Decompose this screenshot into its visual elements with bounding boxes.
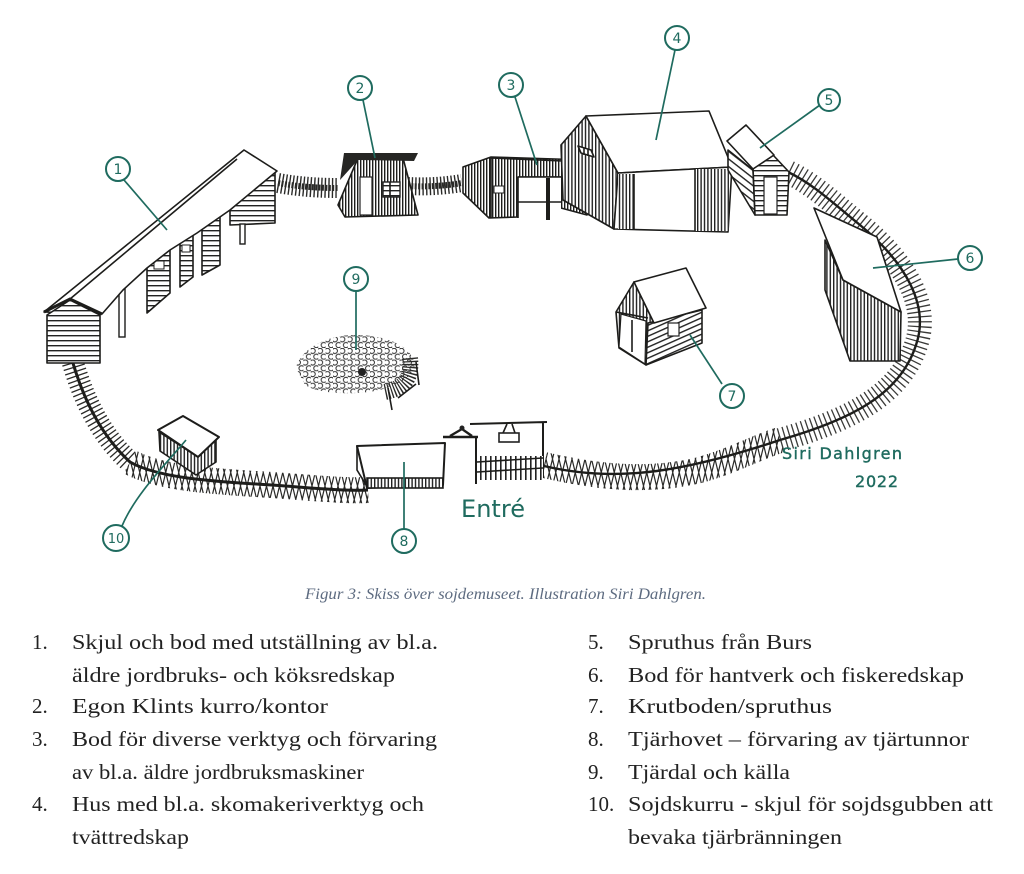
marker 10: 10	[108, 532, 124, 547]
legend: items 5 to 10: 7.	[588, 694, 604, 718]
legend: items 5 to 10: 8.	[588, 727, 604, 751]
legend: items 5 to 10: Spruthus från Burs	[628, 630, 812, 654]
legend: items 5 to 10: Tjärhovet – förvaring av tjärtunnor	[628, 727, 969, 751]
marker 9	[344, 267, 368, 291]
marker 2	[348, 76, 372, 100]
entrance label: Entré	[461, 495, 525, 523]
marker 1	[106, 157, 130, 181]
legend: items 1 to 4: av bl.a. äldre jordbruksmaskiner	[72, 760, 364, 784]
legend: items 5 to 10: 10.	[588, 792, 614, 816]
marker 2: 2	[356, 81, 364, 97]
marker 6: 6	[966, 251, 975, 267]
legend: items 5 to 10: Krutboden/spruthus	[628, 694, 832, 718]
marker 3: 3	[507, 78, 515, 94]
legend: items 1 to 4: Egon Klints kurro/kontor	[72, 694, 328, 718]
building 4: main house	[561, 111, 732, 232]
marker 10	[103, 525, 129, 551]
legend: items 1 to 4: 3.	[32, 727, 48, 751]
legend: items 5 to 10	[588, 630, 993, 849]
building 1: long shed	[44, 150, 277, 363]
building 8: tar storage	[357, 443, 445, 488]
artist signature	[782, 444, 902, 491]
building 10: watch hut	[158, 416, 219, 475]
building 5: pump house from Burs	[727, 125, 789, 215]
legend: items 1 to 4: tvättredskap	[72, 825, 189, 849]
building 7: powder shed	[616, 268, 706, 365]
legend: items 5 to 10: 6.	[588, 663, 604, 687]
building 3: tool shed	[463, 157, 587, 220]
marker 4	[665, 26, 689, 50]
marker 4: 4	[673, 31, 682, 47]
legend: items 1 to 4: 2.	[32, 694, 48, 718]
marker 7: 7	[728, 389, 736, 405]
leader lines	[122, 50, 958, 529]
marker 8: 8	[400, 534, 408, 550]
legend: items 1 to 4: äldre jordbruks- och köksredskap	[72, 663, 395, 687]
fence: left and bottom stretch	[68, 345, 368, 490]
fence: bottom right and east stretch	[544, 172, 920, 477]
fence: between office and tool shed	[408, 183, 462, 186]
legend: items 1 to 4: Hus med bl.a. skomakeriverktyg och	[72, 792, 425, 816]
marker 7	[720, 384, 744, 408]
marker 5	[818, 89, 840, 111]
legend: items 5 to 10: Sojdskurru - skjul för sojdsgubben att	[628, 792, 993, 816]
marker 9: 9	[352, 272, 360, 288]
feature 9: tar kiln and spring	[296, 335, 419, 410]
building 6: craft and fishing shed	[814, 208, 901, 361]
building 2: Egon Klint's office	[338, 153, 418, 217]
marker 3	[499, 73, 523, 97]
marker 1: 1	[114, 162, 122, 178]
marker 5: 5	[825, 93, 833, 109]
marker 6	[958, 246, 982, 270]
legend: items 5 to 10: Tjärdal och källa	[628, 760, 791, 784]
legend: items 1 to 4: Skjul och bod med utställning av bl.a.	[72, 630, 438, 654]
artist signature: Siri Dahlgren	[782, 444, 902, 463]
legend: items 5 to 10: 5.	[588, 630, 604, 654]
legend: items 1 to 4: 4.	[32, 792, 48, 816]
legend: items 1 to 4: 1.	[32, 630, 48, 654]
caption: Figur 3: Skiss över sojdemuseet. Illustration Siri Dahlgren.	[304, 586, 706, 603]
marker 8	[392, 529, 416, 553]
entrance gate	[443, 422, 547, 484]
legend: items 5 to 10: 9.	[588, 760, 604, 784]
legend: items 1 to 4	[32, 630, 438, 849]
legend: items 5 to 10: bevaka tjärbränningen	[628, 825, 843, 849]
fence: between shed and office	[278, 183, 338, 188]
legend: items 5 to 10: Bod för hantverk och fiskeredskap	[628, 663, 964, 687]
legend: items 1 to 4: Bod för diverse verktyg och förvaring	[72, 727, 438, 751]
artist signature: 2022	[855, 472, 898, 491]
